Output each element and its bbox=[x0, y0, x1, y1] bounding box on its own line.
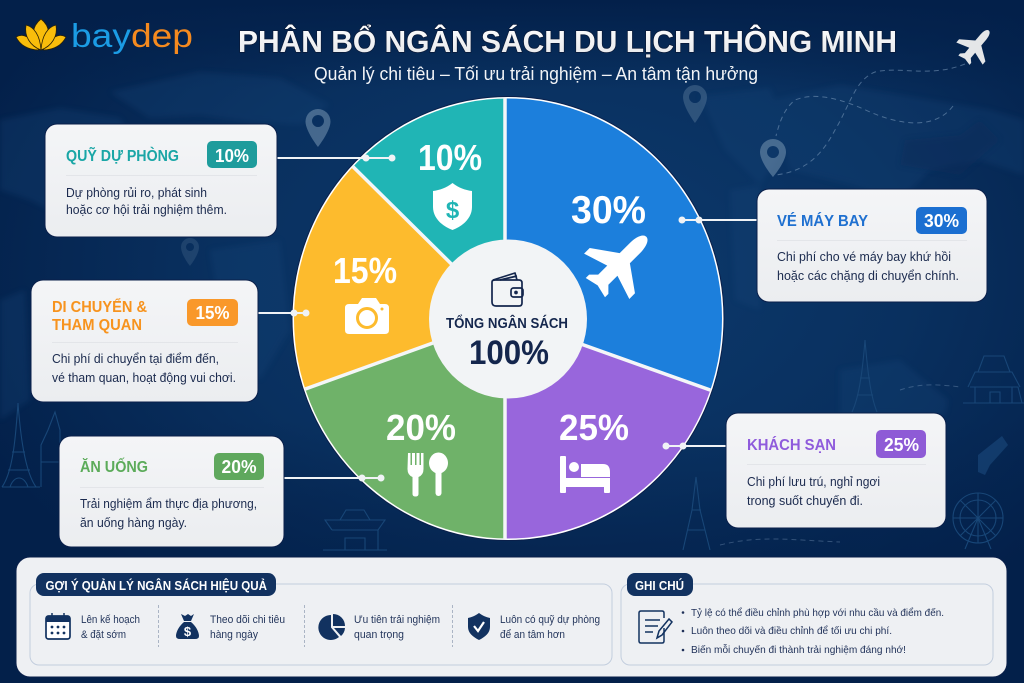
label: 10%: 10% bbox=[418, 137, 482, 178]
badge: 15%: 15% bbox=[196, 303, 230, 323]
value: 100%: 100% bbox=[469, 334, 549, 372]
tip: plan early: Lên kế hoạch bbox=[81, 614, 140, 626]
description: ăn uống hàng ngày. bbox=[80, 515, 187, 530]
heading pill: GHI CHÚ bbox=[635, 578, 684, 593]
donut chart: budget allocation bbox=[292, 96, 724, 541]
logo: baydep bbox=[16, 17, 193, 54]
description: Chi phí cho vé máy bay khứ hồi bbox=[777, 249, 951, 264]
badge: 10% bbox=[207, 141, 257, 168]
icon: camera bbox=[345, 298, 389, 334]
icon: lotus bbox=[16, 19, 66, 50]
connector: transport bbox=[258, 310, 310, 316]
slice: 25% hotel bbox=[505, 346, 710, 538]
connector: food bbox=[284, 474, 384, 482]
icon: shield with dollar bbox=[433, 183, 472, 230]
tip: track spending bbox=[176, 614, 285, 641]
icon: pie chart bbox=[318, 614, 345, 640]
connector: contingency bbox=[277, 154, 396, 162]
badge: 30%: 30% bbox=[924, 211, 959, 231]
tip: track spending: Theo dõi chi tiêu bbox=[210, 614, 285, 626]
description bbox=[66, 185, 227, 217]
description: hoặc cơ hội trải nghiệm thêm. bbox=[66, 202, 227, 217]
heading pill bbox=[627, 573, 693, 596]
tip: plan early: & đặt sớm bbox=[81, 629, 126, 641]
tip: prioritize experiences: quan trọng bbox=[354, 629, 404, 641]
icon: fork and spoon bbox=[408, 452, 448, 496]
tip: track spending: hàng ngày bbox=[210, 629, 258, 641]
description bbox=[52, 351, 236, 385]
slice: 10% contingency bbox=[353, 98, 505, 262]
heading pill bbox=[36, 573, 276, 596]
heading: DI CHUYỂN & bbox=[52, 297, 147, 316]
heading: ĂN UỐNG bbox=[80, 456, 148, 476]
badge: 20% bbox=[214, 453, 264, 480]
panel: bottom section bbox=[16, 557, 1007, 677]
description: hoặc các chặng di chuyển chính. bbox=[777, 268, 959, 283]
connector: flights bbox=[678, 216, 757, 224]
label: 15%: 15% bbox=[333, 250, 397, 291]
panel: contingency fund bbox=[45, 124, 277, 237]
notes list bbox=[682, 607, 944, 656]
slice: 20% food bbox=[305, 344, 505, 538]
label: 20%: 20% bbox=[386, 407, 456, 448]
description bbox=[777, 249, 959, 283]
description: Chi phí lưu trú, nghỉ ngơi bbox=[747, 474, 880, 489]
icon: airplane bbox=[573, 214, 669, 310]
tip: prioritize experiences bbox=[318, 614, 440, 641]
label: 25%: 25% bbox=[559, 407, 629, 448]
panel: notes bbox=[621, 573, 993, 665]
description: vé tham quan, hoạt động vui chơi. bbox=[52, 370, 236, 385]
panel: budget tips bbox=[30, 573, 612, 665]
badge: 25%: 25% bbox=[884, 435, 919, 455]
description: Trải nghiệm ẩm thực địa phương, bbox=[80, 496, 257, 511]
tip: keep a reserve: Luôn có quỹ dự phòng bbox=[500, 614, 600, 626]
badge: 25% bbox=[876, 430, 926, 458]
description bbox=[80, 496, 257, 530]
notes list: Luôn theo dõi và điều chỉnh để tối ưu chi phí. bbox=[691, 625, 892, 637]
icon: wallet bbox=[492, 273, 523, 306]
badge: 30% bbox=[916, 207, 967, 234]
tip: prioritize experiences: Ưu tiên trải nghiệm bbox=[354, 614, 440, 626]
description bbox=[747, 474, 880, 508]
panel: transport and sightseeing bbox=[31, 280, 258, 402]
tip: keep a reserve: để an tâm hơn bbox=[500, 629, 565, 641]
notes list: Tỷ lệ có thể điều chỉnh phù hợp với nhu cầu và điểm đến. bbox=[691, 607, 944, 619]
slice: 15% transport and sightseeing bbox=[294, 166, 450, 389]
heading: THAM QUAN bbox=[52, 317, 142, 334]
description: trong suốt chuyến đi. bbox=[747, 493, 863, 508]
description: Chi phí di chuyển tại điểm đến, bbox=[52, 351, 219, 366]
heading: KHÁCH SẠN bbox=[747, 435, 836, 454]
badge: 15% bbox=[187, 299, 238, 326]
icon: money bag: $ bbox=[184, 624, 192, 639]
tip: keep a reserve bbox=[468, 613, 600, 641]
panel: food bbox=[59, 436, 284, 547]
icon: notepad and pencil bbox=[639, 611, 672, 643]
heading: QUỸ DỰ PHÒNG bbox=[66, 145, 179, 165]
heading bbox=[52, 297, 147, 334]
panel: hotel bbox=[726, 413, 946, 528]
heading pill: GỢI Ý QUẢN LÝ NGÂN SÁCH HIỆU QUẢ bbox=[46, 578, 267, 593]
slice: 30% flights bbox=[505, 98, 722, 390]
badge: 20%: 20% bbox=[222, 457, 256, 477]
icon: calendar bbox=[46, 613, 70, 639]
panel: flights bbox=[757, 189, 987, 302]
subtitle: Quản lý chi tiêu – Tối ưu trải nghiệm – An tâm tận hưởng bbox=[314, 64, 758, 84]
icon: airplane top right bbox=[951, 19, 1002, 71]
badge: 10%: 10% bbox=[215, 146, 249, 166]
wordmark: baydep bbox=[71, 17, 193, 54]
icon: shield with dollar: $ bbox=[446, 197, 460, 224]
tip: plan early bbox=[46, 613, 140, 641]
title: PHÂN BỔ NGÂN SÁCH DU LỊCH THÔNG MINH bbox=[238, 23, 897, 59]
map pins bbox=[181, 85, 786, 266]
connector: hotel bbox=[662, 442, 726, 450]
icon: bed bbox=[560, 456, 610, 493]
icon: shield check bbox=[468, 613, 490, 640]
label: 30%: 30% bbox=[571, 189, 646, 232]
center: total budget bbox=[429, 240, 587, 398]
notes list: Biến mỗi chuyến đi thành trải nghiệm đáng nhớ! bbox=[691, 643, 906, 656]
label: total budget: TỔNG NGÂN SÁCH bbox=[446, 314, 568, 332]
heading: VÉ MÁY BAY bbox=[777, 211, 868, 230]
description: Dự phòng rủi ro, phát sinh bbox=[66, 185, 207, 200]
